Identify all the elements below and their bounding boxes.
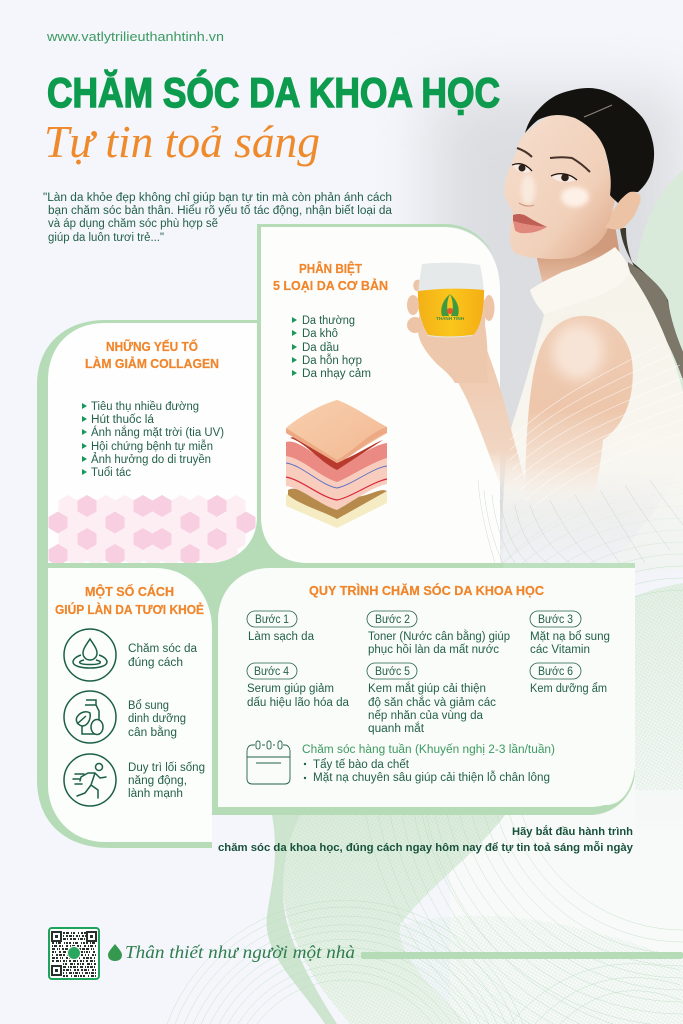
text: nutrition: cân bằng bbox=[128, 726, 177, 739]
intro quote: giúp da luôn tươi trẻ..." bbox=[48, 232, 164, 244]
intro quote: "Làn da khỏe đẹp không chỉ giúp bạn tự tin mà còn phản ánh cách bbox=[43, 192, 392, 204]
glass with juice bbox=[418, 263, 484, 338]
back fingers bbox=[413, 280, 422, 292]
white line overlay on dress bbox=[510, 345, 683, 510]
list: collagen factors bbox=[82, 401, 224, 479]
glass with juice: THÀNH TÍNH bbox=[436, 314, 464, 321]
step 4: dấu hiệu lão hóa da bbox=[247, 697, 350, 709]
text: nutrition: dinh dưỡng bbox=[128, 713, 186, 725]
step 6: Kem dưỡng ẩm bbox=[530, 683, 607, 695]
list: collagen factors: Hội chứng bệnh tự miễn bbox=[91, 440, 213, 453]
step 1: Làm sạch da bbox=[248, 631, 315, 643]
step 5: Kem mắt giúp cải thiện bbox=[368, 682, 486, 695]
background: green line swooshes bbox=[167, 422, 683, 1024]
intro quote bbox=[43, 192, 393, 244]
heading: skincare routine: QUY TRÌNH CHĂM SÓC DA KHOA HỌC bbox=[309, 583, 544, 598]
thin fan lines under portrait bbox=[478, 480, 683, 563]
step 5: nếp nhăn của vùng da bbox=[368, 710, 484, 722]
weekly care: Mặt nạ chuyên sâu giúp cải thiện lỗ chân lông bbox=[313, 771, 550, 784]
panel frame: green backing bbox=[37, 224, 635, 848]
text: skin care bbox=[128, 643, 198, 669]
step 3 bbox=[530, 611, 610, 656]
eyebrows bbox=[517, 148, 590, 172]
step 2: Bước 2 bbox=[375, 614, 410, 626]
step 2: Toner (Nước cân bằng) giúp bbox=[368, 630, 510, 643]
list: skin types: Da hỗn hợp bbox=[302, 354, 362, 367]
cheek highlight bbox=[561, 187, 589, 207]
step 2: phục hồi làn da mất nước bbox=[368, 644, 499, 656]
step 6: Bước 6 bbox=[538, 666, 573, 678]
hair parting highlight bbox=[584, 105, 612, 117]
step 6 bbox=[530, 663, 607, 695]
list: collagen factors: Hút thuốc lá bbox=[91, 414, 155, 426]
weekly care: Tẩy tế bào da chết bbox=[313, 759, 410, 771]
heading: skin types: 5 LOẠI DA CƠ BẢN bbox=[273, 278, 388, 293]
icon: bottle, leaf and egg bbox=[64, 691, 116, 743]
panel: healthy skin tips bbox=[48, 568, 212, 842]
right eye bbox=[551, 174, 577, 182]
panel: collagen factors bbox=[48, 323, 257, 566]
illustration: skin layers bbox=[286, 400, 387, 528]
title: CHĂM SÓC DA KHOA HỌC bbox=[47, 68, 500, 116]
text: active lifestyle: lành mạnh bbox=[128, 788, 183, 800]
step 5: quanh mắt bbox=[368, 722, 425, 735]
background: grey glow behind portrait bbox=[430, 90, 683, 1024]
heading: healthy skin tips: MỘT SỐ CÁCH bbox=[85, 584, 174, 599]
closing call to action: Hãy bắt đầu hành trình bbox=[512, 825, 633, 838]
step 3: Bước 3 bbox=[538, 614, 573, 626]
intro quote: bạn chăm sóc bản thân. Hiểu rõ yếu tố tác động, nhận biết loại da bbox=[48, 205, 393, 217]
text: nutrition bbox=[128, 700, 186, 739]
list: collagen factors: Tuổi tác bbox=[91, 467, 131, 479]
heading: collagen factors: NHỮNG YẾU TỐ bbox=[106, 339, 198, 354]
step 3: các Vitamin bbox=[530, 644, 590, 656]
step 1 bbox=[247, 611, 315, 643]
list: collagen factors: Ảnh hưởng do di truyền bbox=[91, 453, 211, 466]
slogan bar bbox=[361, 952, 683, 959]
heading: healthy skin tips bbox=[55, 584, 204, 617]
left eye bbox=[512, 164, 532, 173]
dress bbox=[503, 247, 683, 580]
step 4: Serum giúp giảm bbox=[247, 683, 334, 695]
text: active lifestyle bbox=[128, 762, 205, 800]
woman portrait bbox=[407, 88, 683, 580]
list: skin types: Da thường bbox=[302, 315, 355, 327]
icon: water drop bbox=[64, 629, 116, 681]
list: skin types: Da dầu bbox=[302, 342, 339, 354]
collar bbox=[530, 247, 630, 314]
step 4 bbox=[247, 663, 350, 709]
hand bbox=[418, 300, 488, 383]
heading: skin types bbox=[273, 261, 388, 293]
heading: collagen factors: LÀM GIẢM COLLAGEN bbox=[85, 356, 219, 371]
step 5: độ săn chắc và giảm các bbox=[368, 696, 496, 709]
ear bbox=[605, 191, 641, 229]
text: nutrition: Bổ sung bbox=[128, 700, 169, 712]
step 4: Bước 4 bbox=[254, 666, 290, 678]
weekly care: Chăm sóc hàng tuần (Khuyến nghị 2-3 lần/tuần) bbox=[302, 744, 555, 756]
QR code bbox=[49, 928, 99, 979]
face bbox=[504, 108, 615, 259]
subtitle script: Tự tin toả sáng bbox=[44, 116, 320, 167]
weekly care bbox=[302, 744, 555, 784]
arm bbox=[525, 316, 633, 515]
ponytail bbox=[620, 228, 683, 378]
arm highlight bbox=[552, 324, 604, 380]
list: skin types bbox=[292, 315, 371, 380]
text: skin care: Chăm sóc da bbox=[128, 643, 198, 655]
icon: calendar bbox=[247, 741, 290, 784]
icon: runner bbox=[64, 754, 116, 806]
text: active lifestyle: năng động, bbox=[128, 775, 187, 787]
hair bbox=[525, 88, 654, 203]
heading: skin types: PHÂN BIỆT bbox=[299, 261, 362, 276]
list: collagen factors: Tiêu thụ nhiều đường bbox=[91, 401, 199, 413]
step 5 bbox=[367, 663, 496, 735]
step 3: Mặt nạ bổ sung bbox=[530, 631, 610, 643]
heading: healthy skin tips: GIÚP LÀN DA TƯƠI KHOẺ bbox=[55, 602, 204, 617]
slogan: Thân thiết như người một nhà bbox=[125, 942, 355, 962]
ponytail striped lower part bbox=[628, 262, 683, 380]
heading: collagen factors bbox=[85, 339, 219, 371]
panel: skincare routine bbox=[218, 568, 635, 807]
closing call to action: chăm sóc da khoa học, đúng cách ngay hôm nay để tự tin toả sáng mỗi ngày bbox=[218, 841, 633, 854]
nose shadow bbox=[519, 203, 534, 206]
background: green curve behind portrait bbox=[634, 170, 683, 470]
illustration: pink collagen hexagons bbox=[48, 495, 256, 566]
icon: green drop bbox=[108, 944, 122, 961]
text: active lifestyle: Duy trì lối sống bbox=[128, 762, 205, 774]
step 1: Bước 1 bbox=[255, 614, 289, 626]
closing call to action bbox=[218, 825, 633, 854]
list: collagen factors: Ánh nắng mặt trời (tia UV) bbox=[91, 426, 224, 439]
forearm bbox=[455, 350, 530, 505]
website url: www.vatlytrilieuthanhtinh.vn bbox=[46, 29, 224, 44]
nose highlight bbox=[521, 175, 535, 205]
neck bbox=[535, 225, 620, 285]
list: skin types: Da nhạy cảm bbox=[302, 368, 371, 380]
panel: skin types bbox=[261, 227, 500, 563]
step 2 bbox=[367, 611, 510, 656]
step 5: Bước 5 bbox=[375, 666, 410, 678]
lips bbox=[513, 214, 547, 233]
fingers bbox=[407, 295, 494, 333]
list: skin types: Da khô bbox=[302, 328, 338, 340]
text: skin care: đúng cách bbox=[128, 657, 183, 669]
intro quote: và áp dụng chăm sóc phù hợp sẽ bbox=[48, 218, 218, 230]
